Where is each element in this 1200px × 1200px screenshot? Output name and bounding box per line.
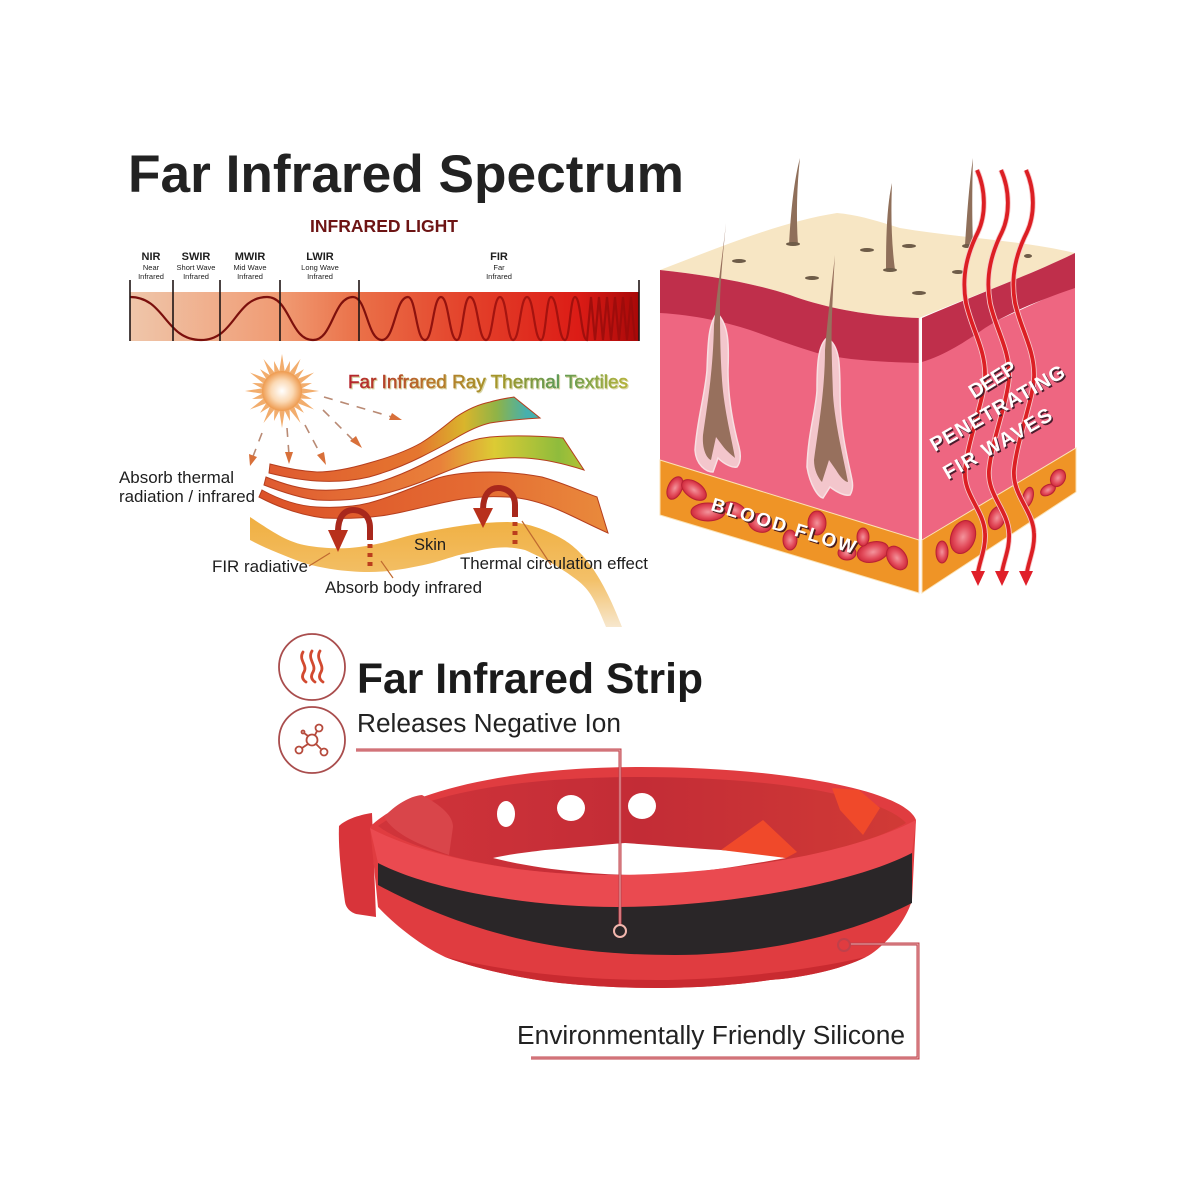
blood cells xyxy=(664,467,1069,574)
spectrum heading: INFRARED LIGHT xyxy=(310,216,458,236)
spectrum band labels: FIR xyxy=(490,251,508,263)
curved arrow: fir radiative xyxy=(328,510,370,568)
icon: molecule xyxy=(279,707,345,773)
spectrum band labels: Infrared xyxy=(183,272,209,281)
fat layer left xyxy=(660,460,919,593)
spectrum band labels: Short Wave xyxy=(177,263,215,272)
label: thermal circulation effect: Thermal circulation effect xyxy=(460,554,648,573)
sun arrowheads xyxy=(249,413,402,466)
textile title foreground: Far Infrared Ray Thermal Textiles xyxy=(348,371,628,392)
skin surface xyxy=(660,213,1075,318)
blood flow label: BLOOD FLOW xyxy=(709,495,858,559)
skin layer xyxy=(250,517,622,627)
textile band 2 xyxy=(264,436,584,500)
spectrum band labels: Infrared xyxy=(486,272,512,281)
panel: skin cross-section xyxy=(660,158,1076,593)
lower shade xyxy=(445,957,866,988)
blood flow label shadow: BLOOD FLOW xyxy=(710,496,860,560)
fir wave arrowheads xyxy=(971,571,1033,586)
callout: environmentally friendly silicone xyxy=(531,939,918,1058)
epidermis band left xyxy=(660,270,919,363)
deep penetrating fir waves label: PENETRATING xyxy=(928,363,1071,458)
panel: far infrared ray thermal textiles diagram xyxy=(119,354,648,627)
bracelet flap xyxy=(339,813,376,917)
label: absorb thermal radiation: radiation / infrared xyxy=(119,487,255,506)
deep penetrating fir waves label: DEEP xyxy=(965,357,1021,403)
strip heading: Far Infrared Strip xyxy=(357,656,703,703)
spectrum band labels: Far xyxy=(493,263,505,272)
deep penetrating fir waves label: DEEP xyxy=(966,359,1022,405)
label: absorb body infrared: Absorb body infrared xyxy=(325,578,482,597)
corner edge xyxy=(918,318,920,593)
icon: sun xyxy=(245,354,319,428)
hair follicle left xyxy=(695,223,740,472)
label: releases negative ion: Releases Negative Ion xyxy=(357,710,621,738)
bracelet inner wall xyxy=(378,777,906,875)
dermis left face xyxy=(660,310,919,540)
inner lump xyxy=(384,795,453,855)
black far infrared strip xyxy=(378,853,912,955)
textile title shadow: Far Infrared Ray Thermal Textiles xyxy=(349,372,629,393)
label: fir radiative: FIR radiative xyxy=(212,557,308,576)
spectrum band labels: SWIR xyxy=(182,251,210,263)
bracelet xyxy=(339,767,916,988)
adjustment holes xyxy=(497,793,656,827)
curved arrow: thermal circulation xyxy=(473,488,515,544)
spectrum band labels: NIR xyxy=(142,251,161,263)
panel: far infrared strip bracelet xyxy=(279,634,918,1058)
fat layer right xyxy=(922,448,1076,593)
spectrum dividers xyxy=(130,280,639,341)
label: skin: Skin xyxy=(414,536,446,554)
deep penetrating fir waves label: FIR WAVES xyxy=(940,404,1056,484)
spectrum band labels: Infrared xyxy=(307,272,333,281)
hairs on top xyxy=(789,158,973,270)
main title: Far Infrared Spectrum xyxy=(128,145,684,204)
panel: infrared light spectrum xyxy=(130,216,639,341)
spectrum band labels: Infrared xyxy=(237,272,263,281)
spectrum gradient bar xyxy=(130,292,639,341)
deep penetrating fir waves label: PENETRATING xyxy=(926,361,1069,456)
spectrum band labels: Infrared xyxy=(138,272,164,281)
label pointers xyxy=(309,521,551,578)
icon: heat waves xyxy=(279,634,345,700)
textile band 1 xyxy=(269,397,540,481)
fir waves xyxy=(964,170,1034,572)
textile band 3 xyxy=(259,472,608,533)
dermis right face xyxy=(922,285,1075,540)
bracelet body xyxy=(370,767,916,988)
upper front strip xyxy=(370,820,916,907)
spectrum band labels: Long Wave xyxy=(301,263,339,272)
sun ray arrows xyxy=(252,397,392,459)
orange inner patches xyxy=(721,788,880,858)
spectrum band labels: Mid Wave xyxy=(233,263,267,272)
centre gap xyxy=(493,843,786,875)
label: absorb thermal radiation: Absorb thermal xyxy=(119,468,234,487)
spectrum band labels: Near xyxy=(143,263,160,272)
deep penetrating fir waves label: FIR WAVES xyxy=(941,406,1058,486)
spectrum wave xyxy=(130,297,635,340)
label: environmentally friendly silicone: Environmentally Friendly Silicone xyxy=(517,1022,905,1050)
pores xyxy=(732,242,1032,295)
spectrum band labels: MWIR xyxy=(235,251,265,263)
hair follicle right xyxy=(807,255,853,498)
spectrum band labels: LWIR xyxy=(306,251,334,263)
epidermis band right xyxy=(922,253,1075,362)
callout: releases negative ion xyxy=(356,750,626,937)
spectrum band labels xyxy=(138,251,512,281)
